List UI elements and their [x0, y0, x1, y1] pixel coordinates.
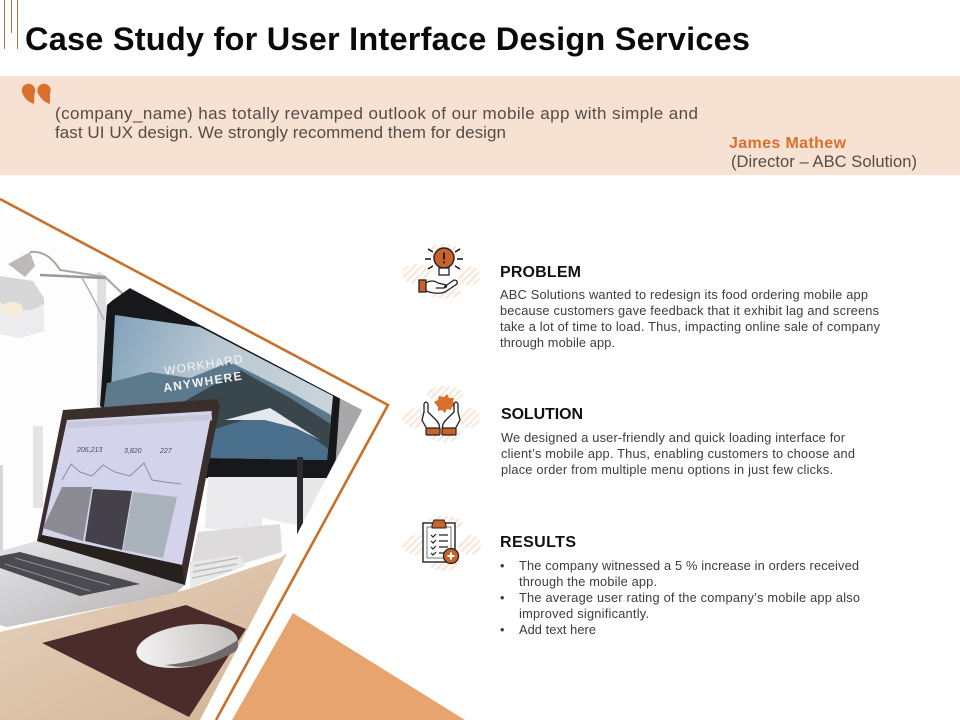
orange frame line	[0, 199, 388, 720]
heading: problem: PROBLEM	[500, 264, 581, 281]
text: solution: client’s mobile app. Thus, enabling customers to choose and	[501, 446, 855, 461]
laptop screen numbers: 206,213	[76, 447, 102, 454]
photo: laptop and monitor on desk	[0, 250, 362, 720]
monitor text	[164, 355, 242, 392]
desk	[0, 553, 288, 720]
text: problem: take a lot of time to load. Thus, impacting online sale of company	[500, 319, 881, 334]
monitor text: WORKHARD	[163, 352, 244, 378]
icon: solution	[402, 386, 480, 442]
lamp	[0, 252, 125, 338]
monitor	[100, 288, 362, 588]
quote text: fast UI UX design. We strongly recommend them for design	[55, 123, 506, 142]
text: results list: Add text here	[519, 622, 596, 637]
text: solution	[501, 430, 855, 477]
icon: problem	[402, 244, 480, 299]
icon: results	[402, 516, 481, 571]
quote author: (Director – ABC Solution)	[731, 153, 917, 171]
text: solution: We designed a user-friendly and quick loading interface for	[501, 430, 846, 445]
text: problem: through mobile app.	[500, 335, 615, 350]
wall panels	[97, 272, 106, 406]
text: results list: improved significantly.	[519, 606, 649, 621]
title: Case Study for User Interface Design Services	[25, 21, 750, 57]
text: results list: •	[500, 590, 504, 605]
laptop chart	[62, 463, 181, 484]
text: problem	[500, 287, 881, 350]
heading: solution: SOLUTION	[501, 406, 583, 423]
text: results list: •	[500, 558, 504, 573]
panel: testimonial band	[0, 76, 960, 175]
text: problem: ABC Solutions wanted to redesign its food ordering mobile app	[500, 287, 868, 302]
quote text	[55, 104, 698, 142]
text: solution: place order from multiple menu options in just few clicks.	[501, 462, 833, 477]
mouse pad	[42, 605, 246, 717]
quote author	[729, 135, 917, 171]
laptop gallery	[43, 487, 92, 541]
quote author: James Mathew	[729, 135, 847, 152]
orange triangle	[232, 613, 465, 720]
icon: quotation mark	[22, 84, 51, 104]
decorative title lines	[4, 0, 18, 49]
text: problem: because customers gave feedback that it exhibit lag and screens	[500, 303, 879, 318]
heading: results: RESULTS	[500, 534, 576, 551]
text: results list: •	[500, 622, 504, 637]
mouse	[136, 624, 238, 668]
monitor text: ANYWHERE	[162, 369, 242, 395]
text: results list: The average user rating of the company’s mobile app also	[519, 590, 860, 605]
quote text: (company_name) has totally revamped outlook of our mobile app with simple and	[55, 104, 698, 123]
text: results list: through the mobile app.	[519, 574, 657, 589]
laptop screen numbers: 227	[159, 448, 173, 455]
laptop screen numbers	[77, 447, 172, 454]
laptop	[0, 399, 220, 627]
laptop screen numbers: 3,820	[124, 448, 142, 455]
text: results list: The company witnessed a 5 % increase in orders received	[519, 558, 859, 573]
text: results list	[500, 558, 860, 637]
